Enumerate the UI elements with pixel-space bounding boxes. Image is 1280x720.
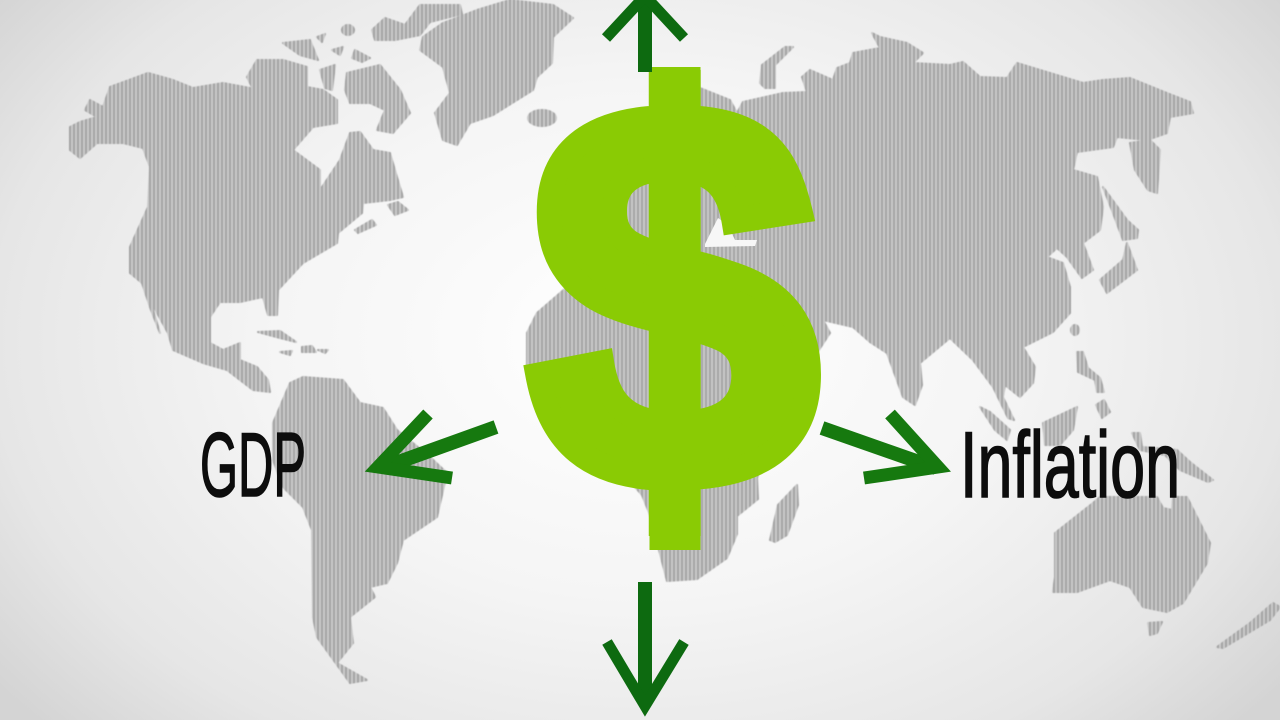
map: Arctic islands xyxy=(283,5,462,90)
arrow: down xyxy=(607,582,684,706)
map: Novaya Zemlya xyxy=(760,47,793,88)
arrow: left to GDP xyxy=(378,414,496,478)
map: Kamchatka xyxy=(1130,140,1160,193)
map: Taiwan and Philippines xyxy=(1071,325,1110,418)
dollar sign xyxy=(531,0,816,598)
map: New Zealand xyxy=(1217,603,1280,648)
map: New Guinea xyxy=(1132,433,1213,482)
arrow: up xyxy=(606,0,684,72)
map: Mediterranean gap xyxy=(705,218,757,247)
map: Caribbean islands xyxy=(258,331,328,355)
map: Sakhalin xyxy=(1103,187,1138,240)
map: Iceland xyxy=(528,110,556,126)
map: Baffin Island xyxy=(345,65,410,133)
map: South America xyxy=(273,377,447,683)
dollar vertical bar xyxy=(650,67,700,550)
map: Newfoundland and Nova Scotia xyxy=(355,202,408,233)
map: Sumatra xyxy=(980,407,1010,440)
label: Inflation: Inflation xyxy=(960,412,1180,517)
map: North America xyxy=(70,60,403,392)
dollar glyph: $ xyxy=(531,0,816,598)
map: Malaysia and Borneo xyxy=(1043,407,1077,445)
map: Eurasia xyxy=(622,33,1193,420)
map: Madagascar xyxy=(770,485,798,542)
map: Greenland xyxy=(420,0,573,145)
map: Japan xyxy=(1100,243,1137,293)
label: GDP: GDP xyxy=(200,415,306,516)
arrow: right to Inflation xyxy=(822,414,938,478)
map: Africa xyxy=(527,280,780,581)
map: Tasmania xyxy=(1148,622,1162,635)
map: Australia xyxy=(1053,497,1210,612)
